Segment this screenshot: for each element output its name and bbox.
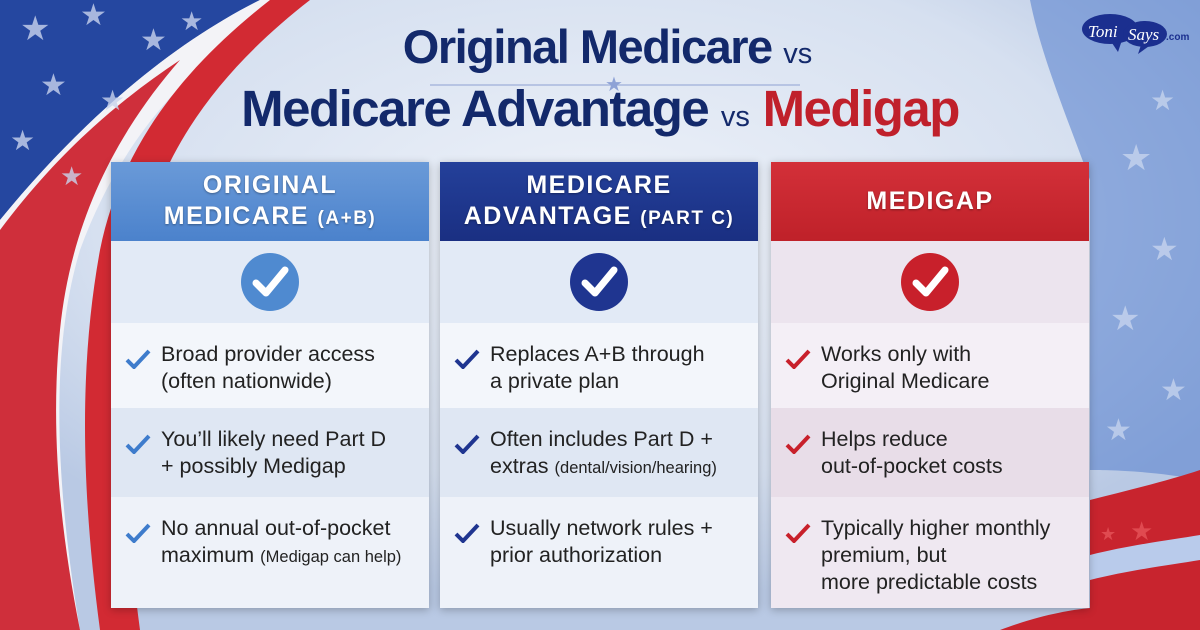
header: ADVANTAGE (PART C) [464,202,734,230]
row 2: You’ll likely need Part D [161,427,386,451]
background flag: ★ [1100,524,1116,544]
row 1: Works only with [821,342,971,366]
header: MEDIGAP [866,187,994,215]
icon: check [771,241,1089,323]
logo: ToniSays.com: Toni [1088,22,1118,41]
row 2 [771,408,1089,497]
background flag: ★ [1160,374,1187,407]
row 2: Often includes Part D + [490,427,713,451]
row 3: premium, but [821,543,946,567]
header [111,162,429,241]
logo: ToniSays.com [1082,14,1189,54]
icon: check [111,241,429,323]
background flag: ★ [180,6,203,36]
panel: medicare advantage [440,162,758,608]
title line 2: Medicare Advantage vs Medigap [241,80,959,137]
background flag: ★ [1150,231,1179,267]
background flag: ★ [40,69,67,102]
panel: original medicare [111,162,429,608]
background flag: ★ [20,10,50,48]
row 2: extras (dental/vision/hearing) [490,454,717,478]
row 1: Replaces A+B through [490,342,705,366]
row 3 [111,497,429,608]
divider star: ★ [605,74,623,96]
background flag: ★ [100,85,125,116]
row 3: more predictable costs [821,570,1037,594]
row 2: Helps reduce [821,427,948,451]
row 1: Broad provider access [161,342,375,366]
background flag: ★ [1110,300,1140,338]
row 1: (often nationwide) [161,369,332,393]
panel: medigap [771,162,1089,608]
background flag: ★ [1120,137,1152,178]
background flag: ★ [1130,516,1153,546]
header [771,162,1089,241]
header: MEDICARE [526,170,672,198]
row 3 [440,497,758,608]
row 1: a private plan [490,369,619,393]
row 3: prior authorization [490,543,662,567]
title line 1: Original Medicare vs [403,20,812,73]
background flag: ★ [1150,85,1175,116]
logo: ToniSays.com: Says [1128,25,1160,44]
row 3: Typically higher monthly [821,516,1050,540]
row 2: out-of-pocket costs [821,454,1003,478]
row 3: maximum (Medigap can help) [161,543,401,567]
row 3 [771,497,1089,608]
row 1 [771,323,1089,408]
row 2: + possibly Medigap [161,454,346,478]
background flag: ★ [60,161,83,191]
row 1: Original Medicare [821,369,989,393]
background flag: ★ [140,24,167,57]
row 3: Usually network rules + [490,516,713,540]
row 2 [111,408,429,497]
icon: check [440,241,758,323]
row 3: No annual out-of-pocket [161,516,390,540]
header: MEDICARE (A+B) [164,202,376,230]
logo: ToniSays.com: .com [1166,32,1189,43]
background flag: ★ [1105,414,1132,447]
header [440,162,758,241]
background flag: ★ [10,125,35,156]
row 1 [111,323,429,408]
row 2 [440,408,758,497]
header: ORIGINAL [203,170,337,198]
row 1 [440,323,758,408]
